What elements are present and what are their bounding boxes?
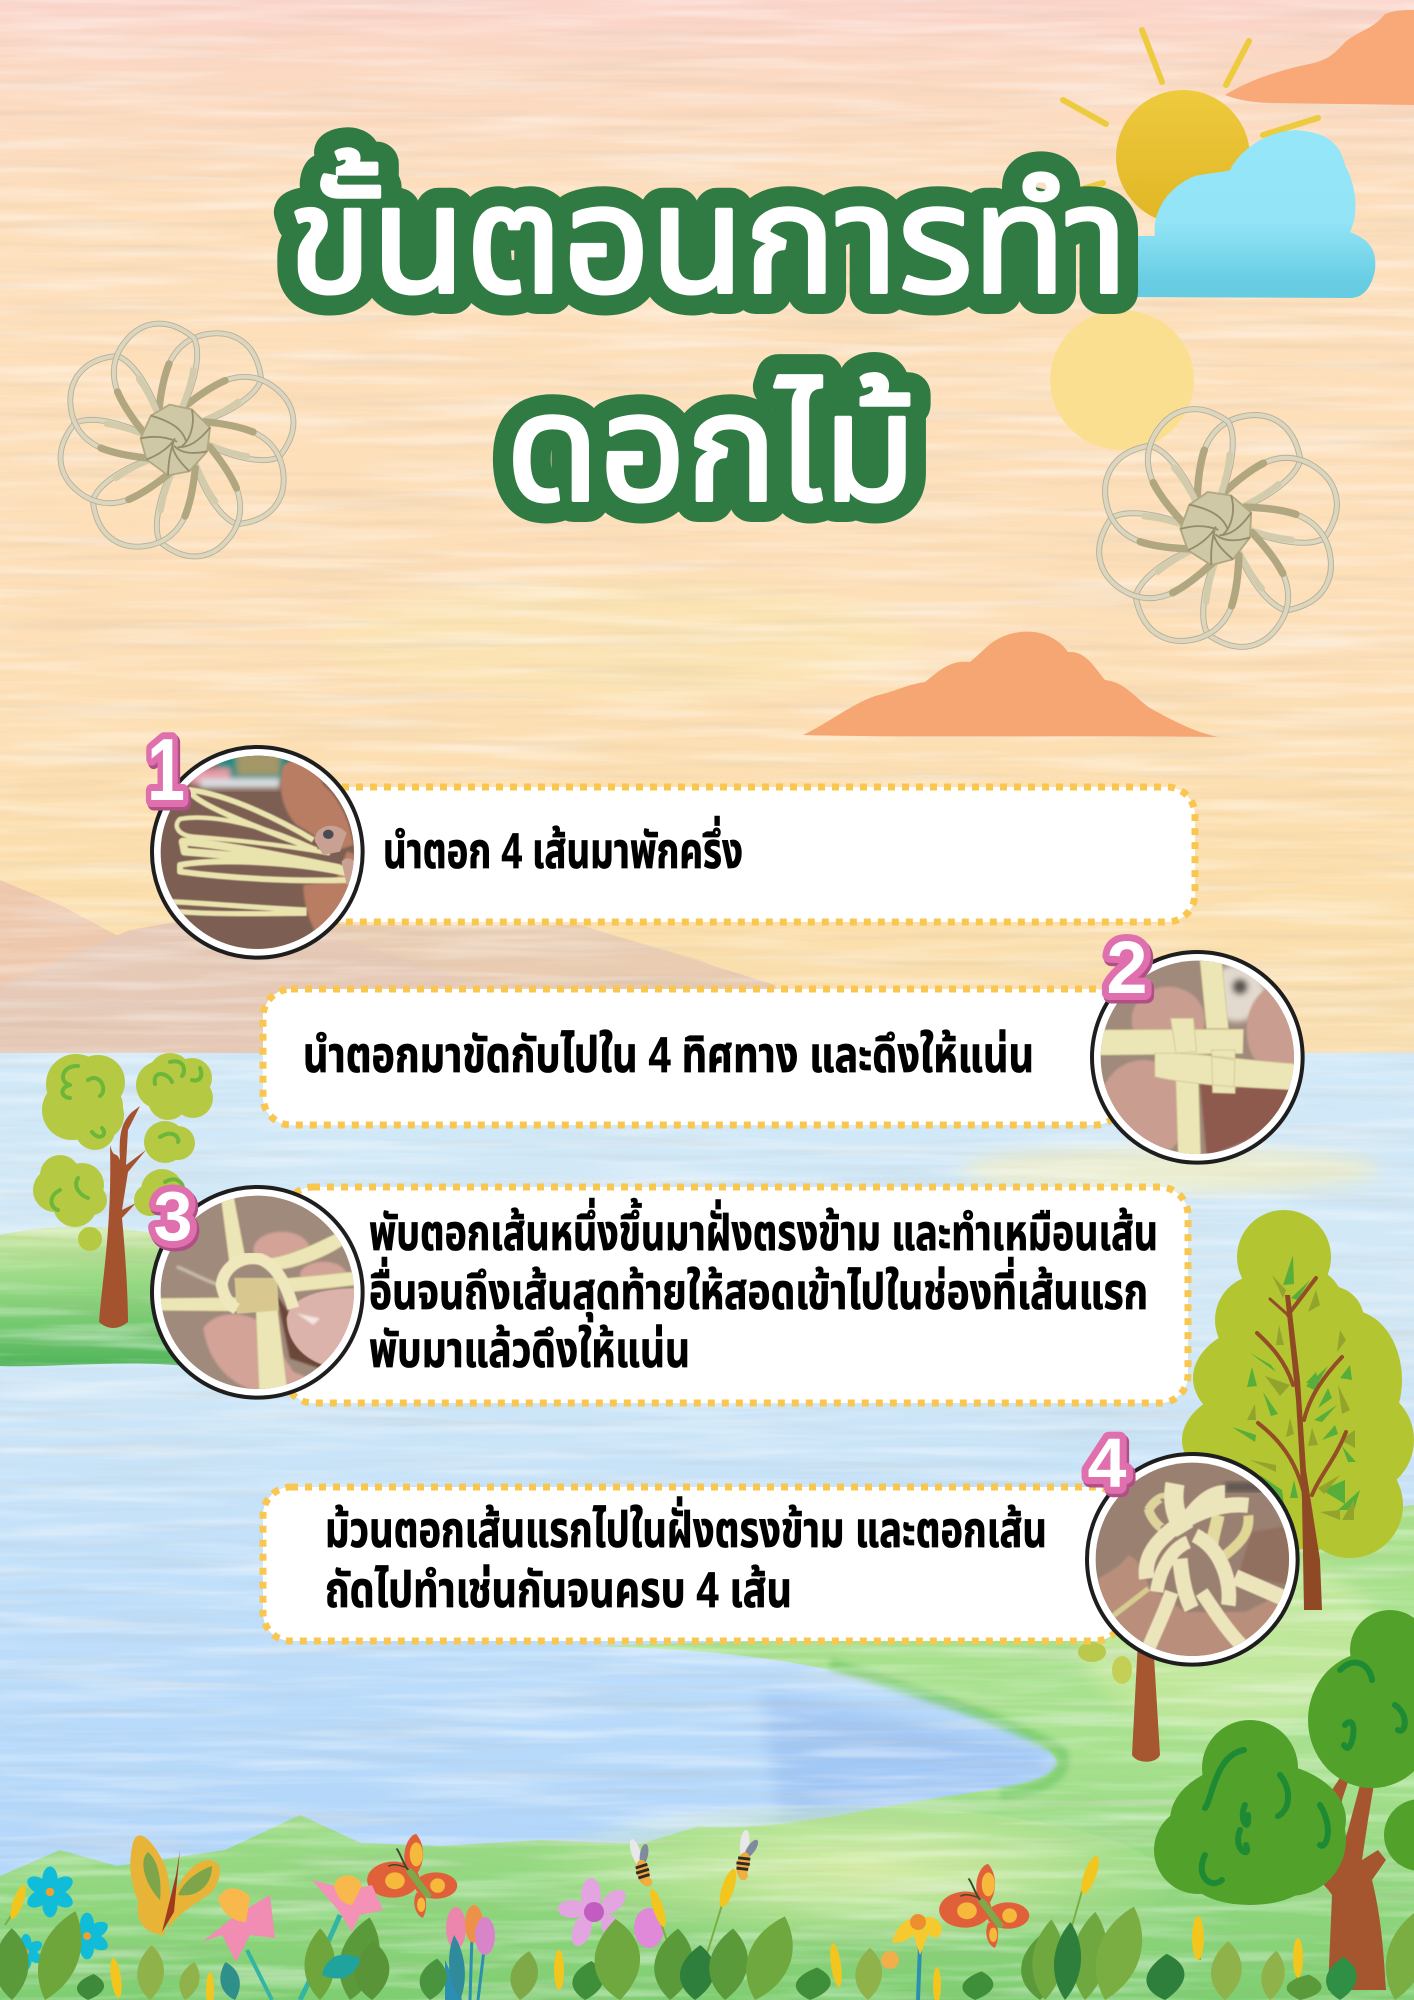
flower: blue right xyxy=(63,1913,111,1959)
background: left bank xyxy=(0,1227,230,1368)
icon: blue cloud xyxy=(1125,130,1375,298)
title: first line: ขั้นตอนการทำ xyxy=(288,149,1128,324)
icon: butterfly orange right xyxy=(935,1864,1029,1948)
background: water xyxy=(0,1053,1414,1953)
flower: woven palm left xyxy=(28,291,326,589)
plants: buds and stems xyxy=(5,1854,1303,2000)
number 3 badge: 3 xyxy=(156,1180,194,1258)
step 1 card xyxy=(300,787,1195,922)
flower: lilac xyxy=(558,1878,664,1949)
flower: blue low xyxy=(8,1934,44,1970)
photo 1: folding strips xyxy=(150,745,367,962)
icon: sun xyxy=(1063,30,1318,224)
icon: butterfly orange left xyxy=(363,1834,457,1918)
flower: pink lily left xyxy=(202,1888,275,2000)
cloud: orange top right xyxy=(1225,10,1414,105)
icon: butterfly yellow xyxy=(130,1835,220,1935)
step 2 card: นำตอกมาขัดกับไปใน 4 ทิศทาง และดึงให้แน่น xyxy=(303,1027,1034,1083)
number 3 badge: 3 xyxy=(154,1177,192,1255)
icon: bee right xyxy=(731,1828,763,1882)
step 4 card: ม้วนตอกเส้นแรกไปในฝั่งตรงข้าม และตอกเส้น xyxy=(325,1497,1047,1558)
photo 3: knot forming xyxy=(150,1185,367,1402)
number 1 badge: 1 xyxy=(147,720,185,819)
background: deep lake colour xyxy=(760,1690,1050,1825)
flower: tulips xyxy=(445,1905,495,2000)
number 2 badge: 2 xyxy=(1108,929,1150,1012)
background: land edge shade xyxy=(830,1664,1063,1795)
background: pale yellow sky patch xyxy=(320,580,920,700)
step 3 card: พับมาแล้วดึงให้แน่น xyxy=(369,1322,690,1378)
background: lighter meadow xyxy=(490,1805,1170,1965)
background: sky xyxy=(0,0,1414,1060)
step 1 card: นำตอก 4 เส้นมาพักครึ่ง xyxy=(383,816,743,879)
step 4 card: ถัดไปทำเช่นกันจนครบ 4 เส้น xyxy=(325,1562,792,1618)
plants: foreground leaves xyxy=(0,1901,1414,2000)
title: second line: ดอกไม้ xyxy=(506,364,916,532)
photo 4: finished knot xyxy=(1085,1452,1302,1669)
step 3 card: อื่นจนถึงเส้นสุดท้ายให้สอดเข้าไปในช่องที่เส้นแรก xyxy=(369,1257,1148,1322)
photo 2: crossed strips xyxy=(1090,950,1307,1167)
tree: bottom right xyxy=(1154,1610,1414,1990)
tree: small trunk below step 4 xyxy=(1078,1640,1160,1762)
cloud: orange middle xyxy=(803,632,1218,737)
sun: pale yellow xyxy=(1050,310,1194,450)
tree: right large xyxy=(1182,1210,1414,1610)
number 4 badge: 4 xyxy=(1090,1427,1129,1505)
step 3 card: พับตอกเส้นหนึ่งขึ้นมาฝั่งตรงข้าม และทำเหมือนเส้น xyxy=(369,1198,1158,1261)
step 4 card xyxy=(263,1487,1123,1641)
flower: pink lily right xyxy=(300,1875,383,2000)
background: lower land xyxy=(0,1505,1414,2000)
flower: blue left top xyxy=(24,1866,76,1918)
step 3 card xyxy=(285,1187,1188,1403)
background: right land glow xyxy=(1080,1550,1380,1730)
flower: yellow xyxy=(881,1914,942,2000)
background: yellow reflection on water xyxy=(960,1146,1380,1194)
number 1 badge: 1 xyxy=(149,723,187,822)
icon: bee left xyxy=(627,1835,658,1889)
flower: woven palm right xyxy=(1055,365,1381,691)
title: second line: ดอกไม้ xyxy=(506,364,916,532)
step 2 card xyxy=(263,989,1123,1125)
tree: left xyxy=(33,1053,213,1328)
number 2 badge: 2 xyxy=(1106,926,1148,1009)
title: first line: ขั้นตอนการทำ xyxy=(288,149,1128,324)
background: mountains xyxy=(0,880,800,1056)
number 4 badge: 4 xyxy=(1088,1424,1127,1502)
